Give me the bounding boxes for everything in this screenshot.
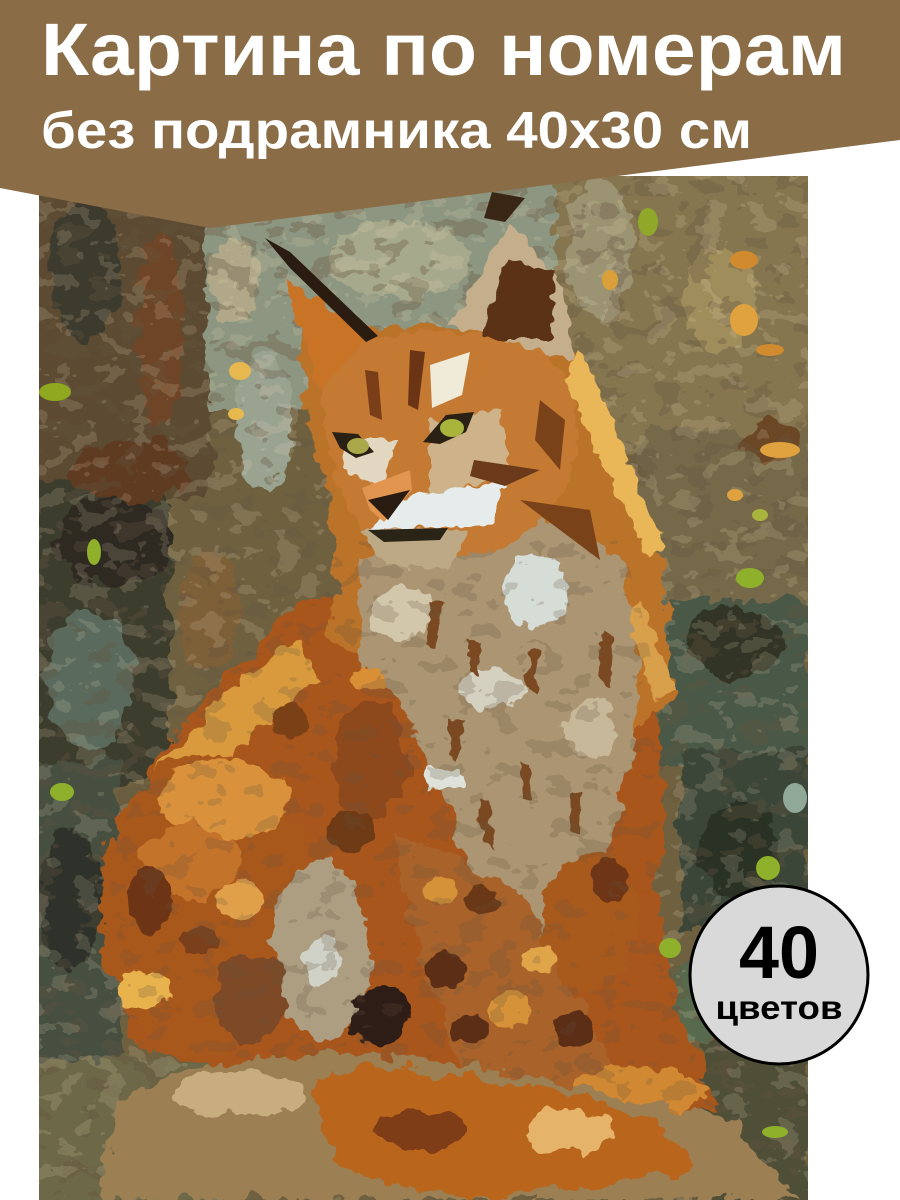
forest background patches	[20, 170, 815, 1200]
fur mottling	[90, 540, 730, 1140]
mouth	[368, 528, 448, 542]
badge: 40 colours	[690, 886, 868, 1064]
painting background	[113, 348, 808, 1200]
leaves	[39, 208, 807, 1138]
foreleg spots	[423, 858, 628, 1048]
badge label: цветов	[716, 989, 842, 1026]
lynx orange rim light	[565, 350, 675, 700]
chest fur strokes	[426, 600, 614, 848]
lynx foreleg	[350, 830, 710, 1114]
nose	[362, 470, 412, 522]
ear tufts	[265, 238, 378, 342]
badge number: 40	[739, 911, 819, 994]
painting: lynx in autumn forest	[20, 170, 815, 1200]
subtitle: без подрамника 40х30 см	[41, 102, 752, 160]
header banner	[0, 0, 900, 228]
banner shape	[0, 0, 900, 228]
log with tail	[100, 1055, 800, 1200]
forehead stripes	[408, 350, 425, 410]
lynx facial details	[265, 192, 600, 560]
lynx body	[110, 320, 720, 1130]
lynx chest fur	[360, 522, 639, 960]
title: Картина по номерам	[41, 8, 846, 91]
haunch brush strokes	[128, 668, 388, 954]
background brush texture	[39, 176, 808, 1060]
eyes	[423, 412, 474, 444]
lynx head	[285, 222, 578, 568]
lynx haunch and paw	[100, 700, 406, 1055]
badge circle	[690, 886, 868, 1064]
